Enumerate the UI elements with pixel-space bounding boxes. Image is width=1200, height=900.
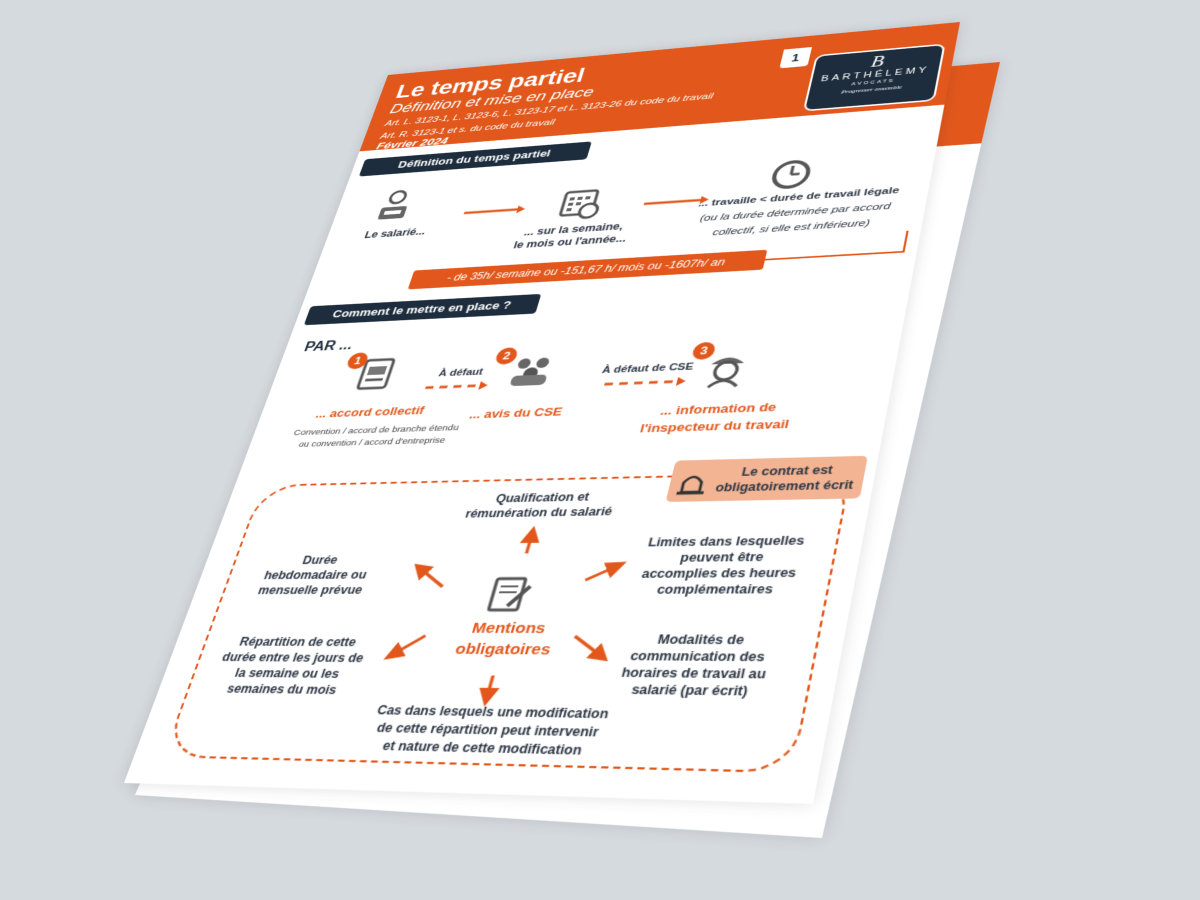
legal references: Art. R. 3123-1 et s. du code du travail <box>379 118 556 141</box>
text: cas de modification: Cas dans lesquels une modification <box>375 703 610 721</box>
logo: B <box>869 53 885 71</box>
text: modalités de communication <box>593 631 799 700</box>
icon: contract <box>483 575 538 614</box>
text: répartition <box>196 634 384 699</box>
text: limites heures complémentaires: Limites dans lesquelles <box>647 534 806 549</box>
text: sur la semaine: ... sur la semaine, <box>523 221 625 238</box>
legal references <box>378 90 715 143</box>
text: durée légale: ... travaille < durée de travail légale <box>697 186 900 209</box>
callout: contrat écrit <box>666 456 868 502</box>
icon: calendar <box>555 186 606 221</box>
step 1: accord collectif <box>265 347 496 456</box>
orange bar: thresholds: - de 35h/ semaine ou -151,67 h/ mois ou -1607h/ an <box>445 256 726 283</box>
icon: employee <box>371 188 419 222</box>
arrow 2 <box>640 194 712 209</box>
text: durée hebdomadaire: Durée <box>301 553 340 567</box>
back sheet <box>135 62 1000 838</box>
step 3: inspecteur du travail <box>624 337 822 438</box>
text: durée légale: (ou la durée déterminée par accord <box>699 202 891 224</box>
text: durée hebdomadaire: hebdomadaire ou <box>262 568 369 582</box>
connector line <box>765 231 909 260</box>
text: qualification: rémunération du salarié <box>464 505 614 520</box>
à défaut de CSE + dashed arrow <box>594 360 697 393</box>
arrow 1 <box>460 203 529 218</box>
text: modalités de communication: Modalités de <box>656 632 746 647</box>
step 3: inspecteur du travail: ... information de <box>659 400 778 417</box>
icon: clock <box>767 157 816 192</box>
front sheet <box>124 22 960 804</box>
icon: group <box>505 352 558 388</box>
text: limites heures complémentaires: peuvent être <box>679 550 765 565</box>
arrows from center <box>124 22 960 804</box>
text: PAR: PAR ... <box>302 338 355 354</box>
text: répartition: semaines du mois <box>225 682 339 697</box>
à défaut de CSE + dashed arrow: À défaut de CSE <box>601 362 695 376</box>
text: mentions obligatoires <box>423 618 590 661</box>
text: répartition: durée entre les jours de <box>220 650 366 665</box>
step 1: accord collectif: ou convention / accord d'entreprise <box>297 436 447 449</box>
number 1 <box>345 352 370 369</box>
text: durée légale <box>665 182 926 244</box>
section label: mise en place <box>304 294 541 325</box>
step 3: inspecteur du travail: l'inspecteur du travail <box>639 417 791 435</box>
text: qualification: Qualification et <box>494 490 591 505</box>
à défaut + dashed arrow <box>421 365 496 396</box>
logo <box>803 44 946 111</box>
number 2: 2 <box>501 350 512 362</box>
text: durée hebdomadaire <box>237 552 394 598</box>
text: limites heures complémentaires <box>620 533 821 598</box>
legal references: Art. L. 3123-1, L. 3123-6, L. 3123-17 et L. 3123-26 du code du travail <box>384 92 714 128</box>
text: sur la semaine <box>494 218 650 253</box>
text: durée légale: collectif, si elle est inférieure) <box>711 218 871 238</box>
panel: mandatory mentions (dashed box) <box>163 471 852 773</box>
section label: definition <box>359 141 592 177</box>
page number <box>779 47 812 68</box>
text: limites heures complémentaires: complémentaires <box>655 582 774 597</box>
text: cas de modification: et nature de cette modification <box>381 738 584 758</box>
à défaut + dashed arrow: À défaut <box>437 367 484 379</box>
header band <box>360 22 960 151</box>
text: modalités de communication: horaires de travail au <box>620 665 768 682</box>
title: Le temps partiel <box>393 65 588 102</box>
orange bar: thresholds <box>408 250 767 289</box>
subtitle: Définition et mise en place <box>388 85 596 117</box>
step 1: accord collectif: ... accord collectif <box>314 404 426 420</box>
text: modalités de communication: salarié (par écrit) <box>630 682 749 699</box>
text: mentions obligatoires: obligatoires <box>453 641 553 659</box>
text: cas de modification <box>344 702 632 761</box>
number 2 <box>494 347 519 365</box>
logo: AVOCATS <box>851 79 895 87</box>
step 2: avis du CSE <box>451 344 597 426</box>
text: limites heures complémentaires: accomplies des heures <box>640 566 798 581</box>
date: Février 2024 <box>375 135 450 152</box>
text: cas de modification: de cette répartition peut intervenir <box>375 721 600 740</box>
icon: inspector <box>699 350 753 389</box>
number 1: 1 <box>352 355 363 367</box>
text: le salarié: Le salarié... <box>363 226 427 240</box>
text: mentions obligatoires: Mentions <box>470 620 548 637</box>
logo: Progresser ensemble <box>841 84 903 95</box>
number 3 <box>691 342 717 360</box>
text: qualification <box>440 488 642 522</box>
page number: 1 <box>790 52 801 64</box>
icon: alarm bell <box>674 467 712 496</box>
icon: document <box>352 357 399 392</box>
callout: contrat écrit: Le contrat est <box>740 463 834 479</box>
step 1: accord collectif: Convention / accord de branche étendu <box>292 423 460 438</box>
callout: contrat écrit: obligatoirement écrit <box>714 478 855 494</box>
text: modalités de communication: communication des <box>629 649 766 664</box>
number 3: 3 <box>699 345 709 357</box>
text: sur la semaine: le mois ou l'année... <box>512 233 628 251</box>
section label: definition: Définition du temps partiel <box>397 147 552 170</box>
logo: BARTHÉLEMY <box>820 65 930 84</box>
text: durée hebdomadaire: mensuelle prévue <box>256 583 364 597</box>
step 2: avis du CSE: ... avis du CSE <box>468 405 564 421</box>
text: répartition: Répartition de cette <box>238 635 358 649</box>
section label: mise en place: Comment le mettre en place ? <box>331 299 513 320</box>
text: répartition: la semaine ou les <box>233 666 341 681</box>
